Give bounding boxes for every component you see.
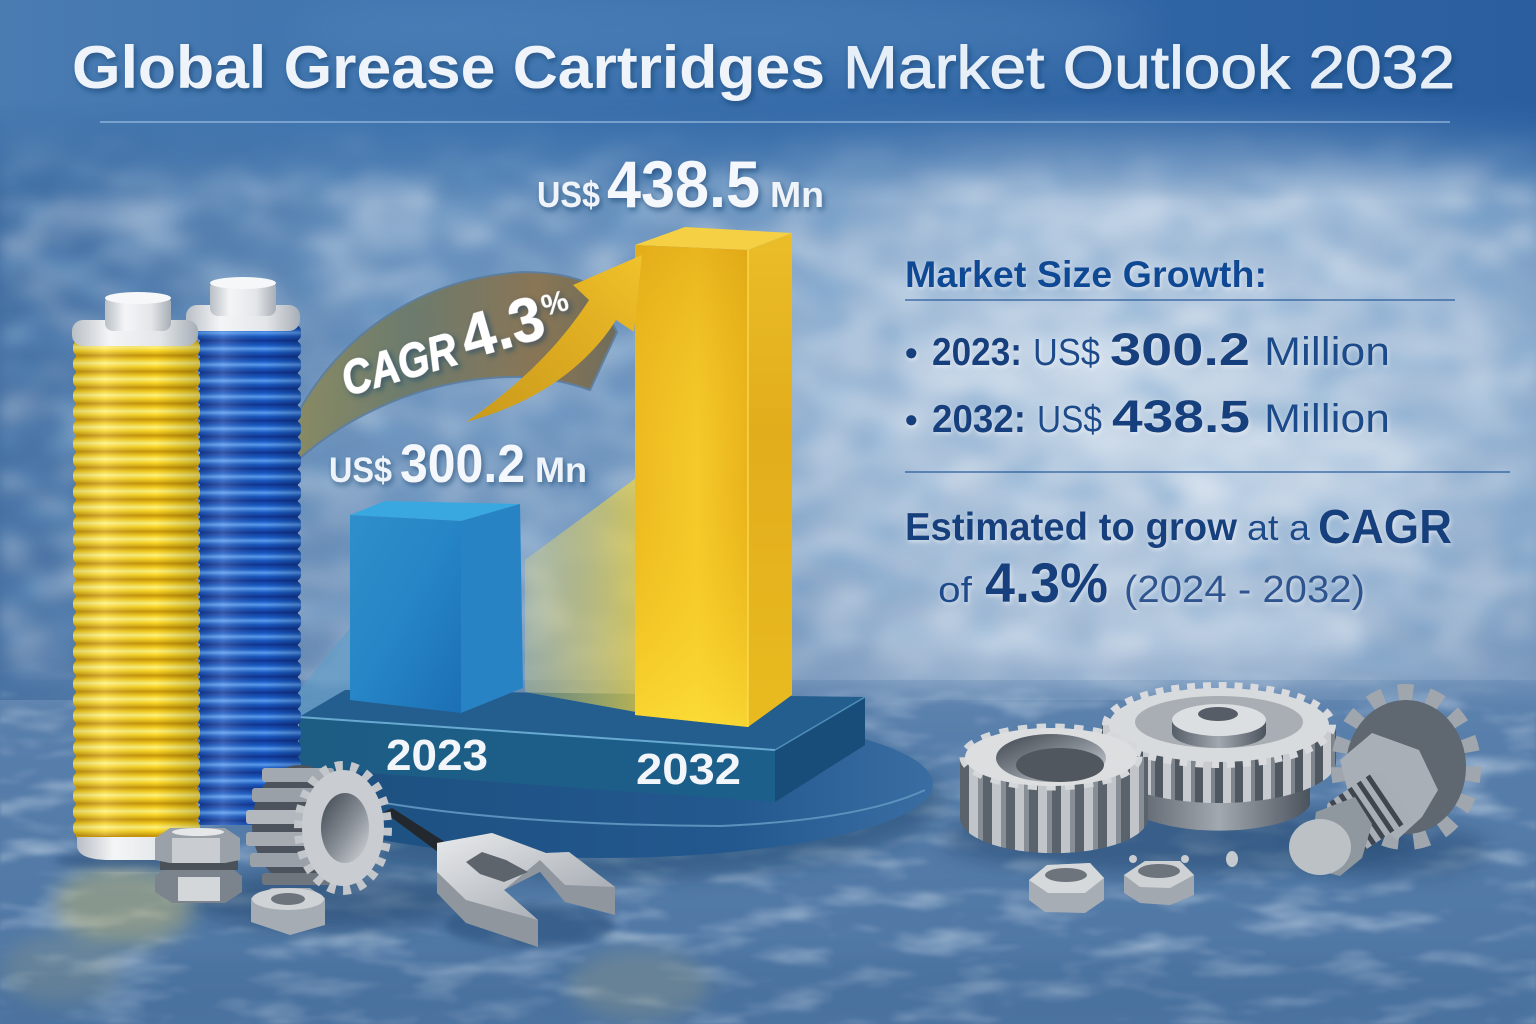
- bar: 2032: [635, 227, 792, 727]
- value label: 300.2: 300.2: [400, 434, 525, 494]
- CAGR statement: (2024 - 2032): [1124, 569, 1365, 611]
- CAGR statement: [905, 501, 1452, 614]
- CAGR label: 4.3: [452, 283, 552, 373]
- platform with disc: [255, 628, 945, 880]
- nut stack: [155, 828, 242, 903]
- disc: [267, 710, 933, 858]
- label: 2032: 2032: [636, 745, 741, 794]
- hex nut: [251, 888, 325, 935]
- tools: right gears: [940, 686, 1490, 913]
- row: 2023: US$: [1033, 332, 1100, 374]
- value label: 438.5: 438.5: [607, 147, 760, 221]
- arrowhead: [466, 255, 642, 422]
- title: Market Outlook 2032: [843, 34, 1455, 101]
- CAGR statement: of: [938, 569, 973, 610]
- title: [72, 34, 1455, 101]
- panel: market size growth: [905, 254, 1510, 614]
- row: 2023: Million: [1264, 330, 1390, 374]
- left gear: [960, 727, 1148, 853]
- row: 2032: [905, 391, 1390, 442]
- pinion gear: [246, 765, 387, 890]
- row: 2023: [905, 324, 1390, 375]
- CAGR statement: 4.3%: [985, 551, 1108, 614]
- nut B: [1124, 855, 1194, 905]
- CAGR statement: at a: [1247, 507, 1311, 548]
- platform front: [299, 717, 775, 802]
- cartridge: yellow: [55, 292, 225, 870]
- title: Global Grease Cartridges: [72, 34, 825, 101]
- value label: 300.2: US$: [329, 451, 392, 490]
- CAGR statement: CAGR: [1318, 501, 1452, 554]
- label: 2023: 2023: [386, 731, 488, 780]
- CAGR label: CAGR: [335, 323, 464, 407]
- metal fragment: [1226, 851, 1238, 867]
- cartridge: blue: [186, 277, 301, 825]
- row: 2032: 2032:: [932, 398, 1026, 441]
- value label: 438.5: [537, 147, 824, 221]
- row: 2023: 2023:: [932, 331, 1022, 374]
- bar: 2023: [350, 501, 523, 713]
- row: 2032: •: [905, 399, 918, 440]
- wrench handle: [384, 808, 445, 852]
- row: 2032: Million: [1264, 397, 1390, 441]
- tools: left group: [155, 765, 615, 947]
- value label: 300.2: [329, 434, 587, 494]
- yellow growth area: [525, 478, 636, 712]
- row: 2032: 438.5: [1112, 391, 1250, 442]
- large gear: [1102, 686, 1336, 831]
- wrench: [437, 833, 615, 947]
- nut A: [1029, 863, 1104, 913]
- CAGR label: %: [538, 284, 572, 323]
- row: 2023: •: [905, 332, 918, 373]
- CAGR label: [331, 275, 580, 408]
- row: 2032: US$: [1037, 399, 1102, 441]
- value label: 438.5: US$: [537, 174, 600, 215]
- row: 2023: 300.2: [1110, 324, 1250, 375]
- CAGR statement: Estimated to grow: [905, 506, 1238, 549]
- bolt with bevel gear: [1289, 697, 1468, 876]
- heading: Market Size Growth:: [905, 254, 1267, 295]
- platform side: [775, 697, 865, 802]
- value label: 300.2: Mn: [535, 451, 587, 490]
- platform top: [299, 690, 865, 750]
- blue growth area: [299, 628, 350, 717]
- arrow: CAGR growth swoosh: [298, 255, 642, 460]
- value label: 438.5: Mn: [770, 174, 824, 215]
